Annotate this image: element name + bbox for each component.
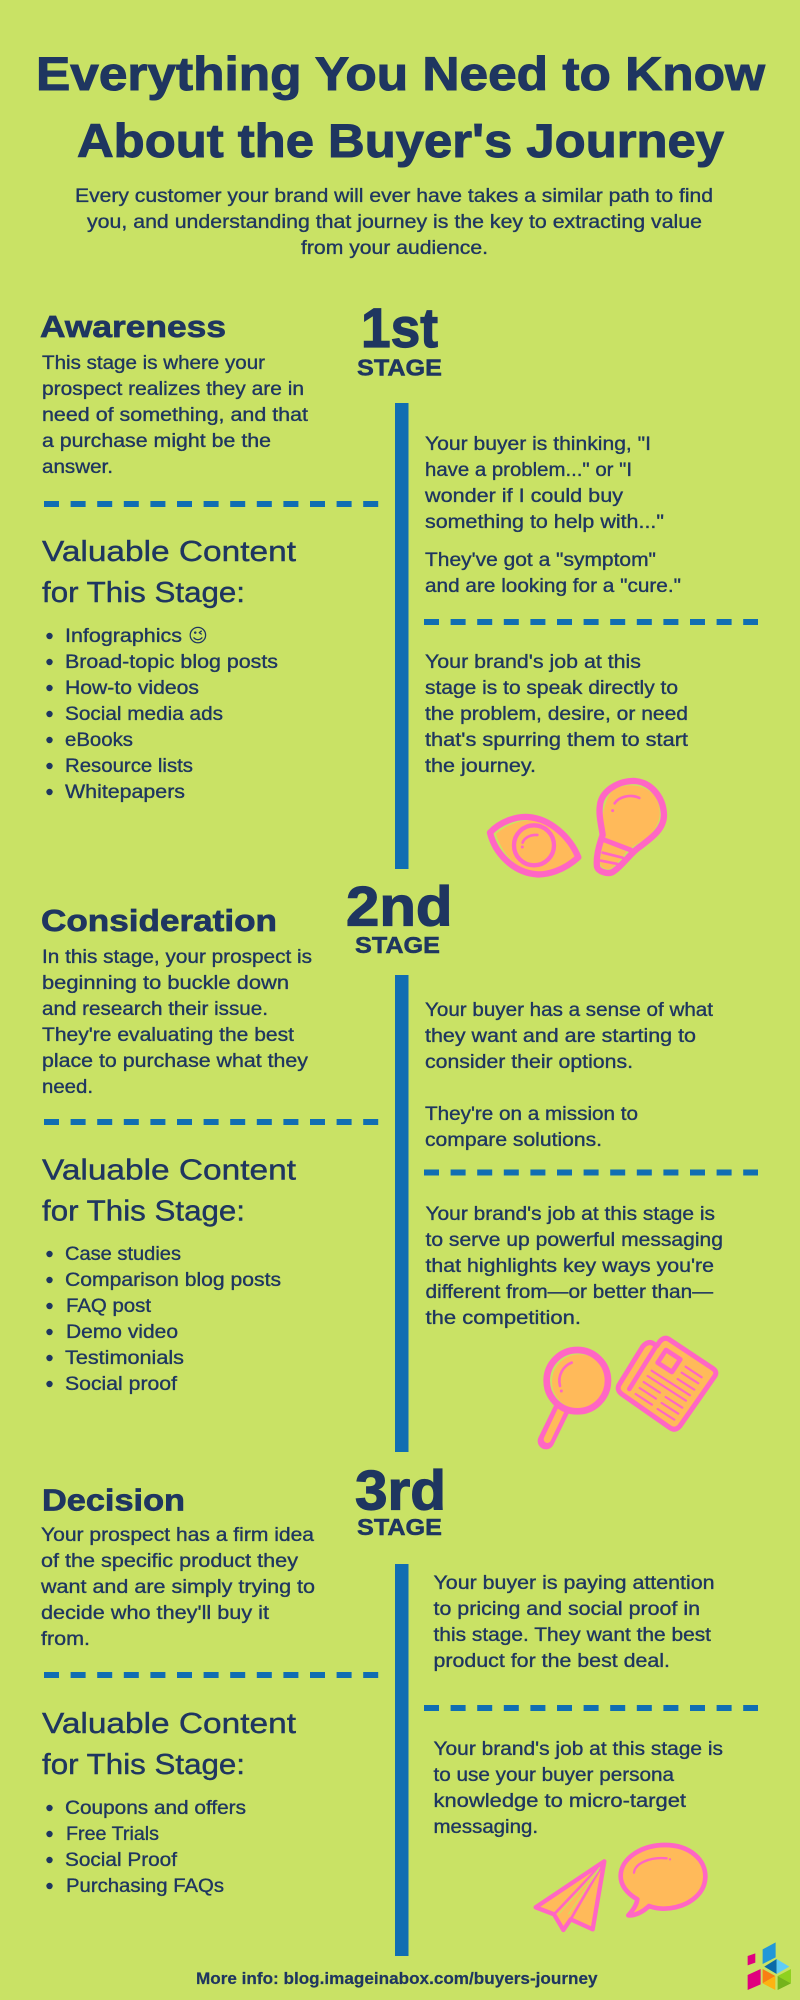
timeline bar 2 bbox=[395, 975, 408, 1452]
footer link: More info: blog.imageinabox.com/buyers-journey bbox=[196, 1969, 598, 1988]
text block: buyer pricing: this stage. They want the best bbox=[434, 1624, 712, 1646]
text block: consideration description: place to purchase what they bbox=[42, 1050, 308, 1072]
heading: Decision: Decision bbox=[42, 1482, 185, 1518]
panel: stage 2 right column bbox=[424, 999, 758, 1329]
icon: speech bubble bbox=[621, 1845, 705, 1915]
text block: buyer pricing: Your buyer is paying attention bbox=[434, 1572, 714, 1594]
heading: valuable content stage 3 bbox=[42, 1708, 296, 1781]
text block: buyer pricing: product for the best deal. bbox=[434, 1650, 670, 1672]
text block: buyer thinking: wonder if I could buy bbox=[424, 485, 623, 507]
text block: brand job stage 1: stage is to speak directly to bbox=[425, 677, 678, 699]
list: stage 2 content types: Comparison blog posts bbox=[65, 1269, 281, 1291]
text block: decision description: of the specific product they bbox=[41, 1550, 298, 1572]
panel: stage 2 consideration left column bbox=[41, 903, 378, 1395]
list: stage 1 content types: Resource lists bbox=[65, 755, 193, 777]
panel: stage 1 right column bbox=[424, 433, 758, 777]
icon: eye bbox=[490, 817, 578, 874]
icon: newspaper bbox=[618, 1338, 716, 1429]
list: stage 3 content types: Coupons and offers bbox=[65, 1797, 246, 1819]
list: stage 2 content types: Case studies bbox=[65, 1243, 181, 1265]
text block: buyer thinking: have a problem..." or "I bbox=[425, 459, 632, 481]
text block: consideration description: and research their issue. bbox=[42, 998, 268, 1020]
text block: buyer sense: They're on a mission to bbox=[425, 1103, 638, 1125]
text block: brand job stage 2: Your brand's job at this stage is bbox=[426, 1203, 715, 1225]
list: stage 2 content types: Social proof bbox=[65, 1373, 178, 1395]
panel: stage 1 awareness left column bbox=[40, 309, 378, 803]
text block: consideration description bbox=[42, 946, 312, 1098]
list: stage 1 content types: Whitepapers bbox=[65, 781, 185, 803]
text block: brand job stage 2: the competition. bbox=[426, 1307, 581, 1329]
heading: valuable content stage 2 bbox=[42, 1154, 296, 1228]
text block: consideration description: In this stage, your prospect is bbox=[42, 946, 312, 968]
text block: brand job stage 3 bbox=[434, 1738, 723, 1838]
text block: awareness description: This stage is where your bbox=[42, 352, 266, 374]
list: stage 2 content types: FAQ post bbox=[66, 1295, 152, 1317]
text block: buyer thinking: and are looking for a "cure." bbox=[425, 575, 681, 597]
text block: brand job stage 1: the problem, desire, or need bbox=[425, 703, 688, 725]
text block: decision description: decide who they'll buy it bbox=[41, 1602, 270, 1624]
heading: Awareness: Awareness bbox=[40, 309, 226, 344]
panel: stage 3 decision left column bbox=[40, 1482, 378, 1897]
stage 1 number: 1st bbox=[361, 296, 438, 359]
list: stage 1 content types: 😉 bbox=[188, 625, 208, 647]
text block: consideration description: need. bbox=[42, 1076, 93, 1098]
list: stage 3 content types: Free Trials bbox=[66, 1823, 159, 1845]
text block: awareness description: answer. bbox=[42, 456, 113, 478]
text block: brand job stage 2: that highlights key ways you're bbox=[426, 1255, 714, 1277]
text block: buyer pricing: to pricing and social proof in bbox=[434, 1598, 700, 1620]
heading: Consideration: Consideration bbox=[41, 903, 277, 938]
text block: buyer sense: Your buyer has a sense of what bbox=[425, 999, 714, 1021]
text block: decision description: Your prospect has a firm idea bbox=[41, 1524, 314, 1546]
text block: awareness description: need of something, and that bbox=[42, 404, 309, 426]
text block: buyer thinking: Your buyer is thinking, "I bbox=[425, 433, 651, 455]
text block: awareness description: a purchase might be the bbox=[42, 430, 271, 452]
timeline bar 3 bbox=[395, 1564, 408, 1956]
list: stage 1 content types: How-to videos bbox=[65, 677, 199, 699]
stage 3 number: 3rd bbox=[355, 1458, 446, 1522]
text block: decision description: want and are simply trying to bbox=[40, 1576, 315, 1598]
list: stage 1 content types: Social media ads bbox=[65, 703, 223, 725]
text block: consideration description: They're evaluating the best bbox=[42, 1024, 295, 1046]
text block: brand job stage 3: knowledge to micro-target bbox=[434, 1790, 687, 1812]
intro text: Every customer your brand will ever have takes a similar path to find bbox=[75, 185, 713, 207]
title: About the Buyer's Journey bbox=[77, 114, 724, 167]
text block: buyer thinking: something to help with..." bbox=[425, 511, 664, 533]
text block: buyer sense: consider their options. bbox=[425, 1051, 633, 1073]
list: stage 1 content types bbox=[46, 625, 278, 803]
title bbox=[36, 47, 765, 167]
text block: awareness description bbox=[42, 352, 309, 478]
text block: decision description: from. bbox=[41, 1628, 90, 1650]
text block: buyer sense: compare solutions. bbox=[425, 1129, 602, 1151]
icon: logo bbox=[748, 1942, 791, 1990]
text block: buyer thinking bbox=[424, 433, 681, 597]
text block: brand job stage 1 bbox=[425, 651, 689, 777]
intro text: from your audience. bbox=[301, 237, 488, 259]
text block: awareness description: prospect realizes they are in bbox=[42, 378, 304, 400]
text block: brand job stage 2 bbox=[426, 1203, 723, 1329]
list: stage 1 content types: eBooks bbox=[65, 729, 133, 751]
heading: valuable content stage 3: Valuable Content bbox=[42, 1708, 296, 1740]
icon: light bulb bbox=[597, 781, 664, 873]
heading: valuable content stage 3: for This Stage: bbox=[42, 1749, 245, 1781]
list: stage 1 content types: Infographics bbox=[65, 625, 182, 647]
list: stage 2 content types: Demo video bbox=[66, 1321, 178, 1343]
text block: buyer thinking: They've got a "symptom" bbox=[425, 549, 656, 571]
icon: magnifying glass bbox=[546, 1350, 608, 1441]
text block: buyer sense bbox=[425, 999, 714, 1151]
heading: valuable content stage 1 bbox=[42, 536, 296, 609]
list: stage 3 content types bbox=[46, 1797, 246, 1897]
heading: valuable content stage 2: Valuable Content bbox=[42, 1154, 296, 1186]
stage 2 number: 2nd bbox=[346, 874, 452, 938]
text block: consideration description: beginning to buckle down bbox=[42, 972, 289, 994]
list: stage 2 content types: Testimonials bbox=[65, 1347, 184, 1369]
stage 1 number: STAGE bbox=[357, 354, 442, 380]
heading: valuable content stage 2: for This Stage: bbox=[42, 1196, 245, 1228]
panel: stage 3 right column bbox=[424, 1572, 758, 1838]
title: Everything You Need to Know bbox=[36, 47, 765, 100]
text block: decision description bbox=[40, 1524, 315, 1650]
icon: paper plane bbox=[536, 1861, 604, 1930]
text block: brand job stage 3: messaging. bbox=[434, 1816, 538, 1838]
stage 2 number: STAGE bbox=[355, 932, 440, 958]
list: stage 2 content types bbox=[46, 1243, 281, 1395]
heading: valuable content stage 1: Valuable Content bbox=[42, 536, 296, 568]
text block: buyer sense: they want and are starting to bbox=[425, 1025, 696, 1047]
text block: brand job stage 1: the journey. bbox=[425, 755, 536, 777]
text block: brand job stage 2: to serve up powerful messaging bbox=[426, 1229, 723, 1251]
text block: buyer pricing bbox=[434, 1572, 714, 1672]
heading: valuable content stage 1: for This Stage: bbox=[42, 577, 245, 609]
intro text bbox=[75, 185, 713, 259]
text block: brand job stage 1: Your brand's job at this bbox=[425, 651, 641, 673]
list: stage 3 content types: Purchasing FAQs bbox=[66, 1875, 224, 1897]
timeline bar 1 bbox=[395, 403, 408, 869]
text block: brand job stage 3: to use your buyer persona bbox=[434, 1764, 674, 1786]
text block: brand job stage 1: that's spurring them to start bbox=[425, 729, 689, 751]
intro text: you, and understanding that journey is the key to extracting value bbox=[87, 211, 702, 233]
text block: brand job stage 2: different from—or better than— bbox=[426, 1281, 714, 1303]
list: stage 3 content types: Social Proof bbox=[65, 1849, 178, 1871]
text block: brand job stage 3: Your brand's job at this stage is bbox=[434, 1738, 723, 1760]
list: stage 1 content types: Broad-topic blog posts bbox=[65, 651, 278, 673]
stage 3 number: STAGE bbox=[357, 1514, 442, 1540]
